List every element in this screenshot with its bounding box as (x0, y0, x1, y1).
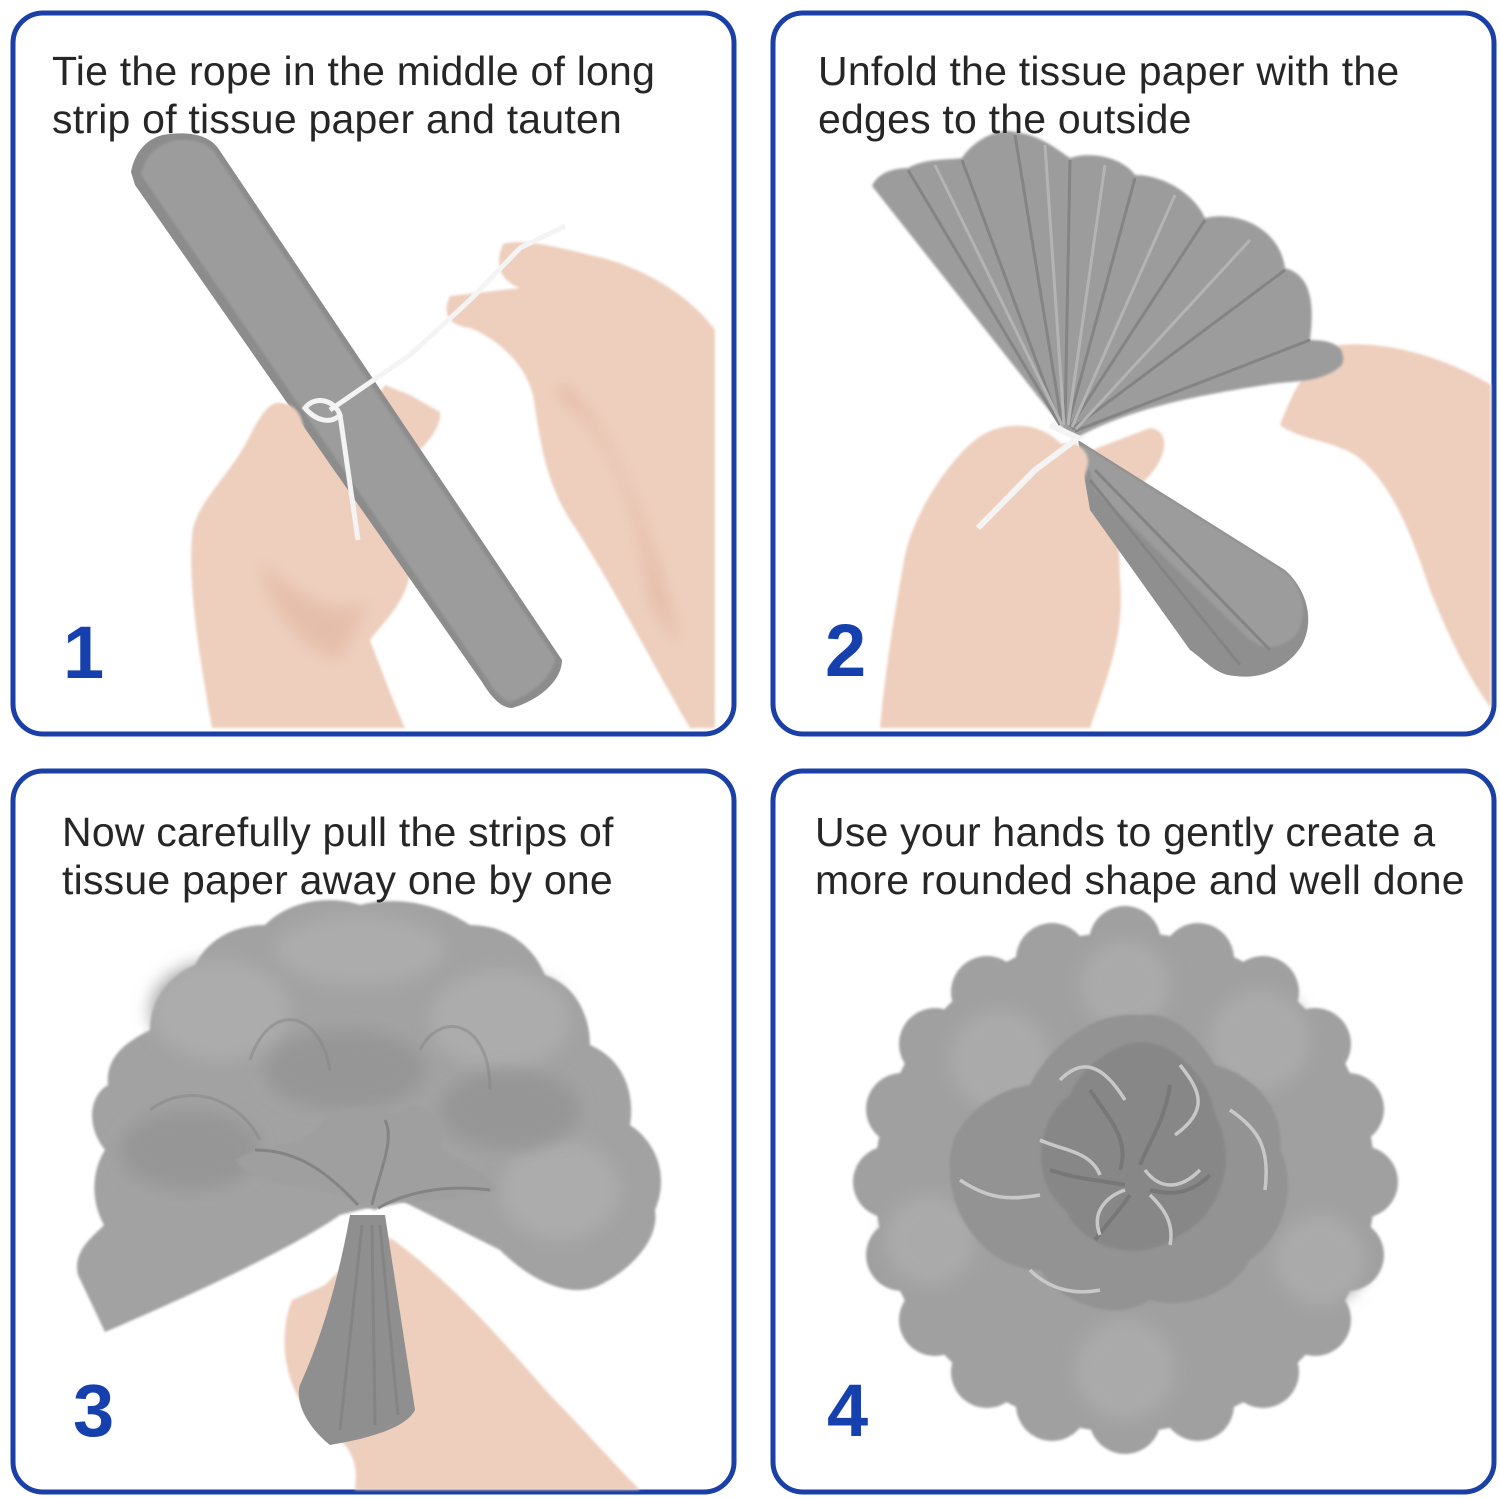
illustration: hand gripping stem (284, 1237, 640, 1490)
illustration: folded stem in hand (299, 1215, 415, 1445)
illustration: inner petals (950, 1014, 1288, 1310)
illustration: left hand (880, 426, 1164, 728)
step text 2: edges to the outside (818, 96, 1192, 142)
illustration: right hand pulling rope (447, 242, 715, 728)
panel: step 2 (773, 13, 1494, 734)
illustration: right hand (1280, 344, 1491, 708)
illustration: folded grey paper strip (131, 133, 562, 708)
illustration: scalloped outer edge (853, 906, 1398, 1454)
panel: step 1 (13, 13, 734, 734)
panel: step 3 (13, 771, 734, 1492)
illustration: thumb over strip (245, 404, 312, 521)
step text 4: more rounded shape and well done (815, 857, 1465, 903)
illustration: lower paper fan (1078, 440, 1308, 677)
illustration: unfolded paper fan (872, 131, 1343, 438)
step number 3: 3 (73, 1369, 114, 1452)
step text 3: tissue paper away one by one (62, 857, 613, 903)
panel: step 4 (773, 771, 1494, 1492)
illustration: white rope (305, 226, 565, 540)
step number 2: 2 (825, 609, 866, 692)
illustration: central petals (235, 1106, 496, 1210)
step text 3: Now carefully pull the strips of (62, 809, 614, 855)
illustration: white rope (978, 425, 1078, 528)
step number 1: 1 (63, 611, 104, 694)
illustration: left hand holding strip (191, 385, 440, 728)
step text 2: Unfold the tissue paper with the (818, 48, 1399, 94)
step text 4: Use your hands to gently create a (815, 809, 1435, 855)
illustration: left fingers over paper (990, 443, 1088, 554)
illustration: light petal edges (960, 1065, 1266, 1292)
step text 1: strip of tissue paper and tauten (52, 96, 622, 142)
illustration: partly opened pom pom (77, 900, 661, 1332)
illustration: dark petal folds (1050, 1085, 1210, 1240)
illustration: finished pom pom (853, 906, 1398, 1454)
illustration: mid petals (885, 940, 1365, 1420)
step text 1: Tie the rope in the middle of long (52, 48, 655, 94)
step number 4: 4 (827, 1369, 868, 1452)
